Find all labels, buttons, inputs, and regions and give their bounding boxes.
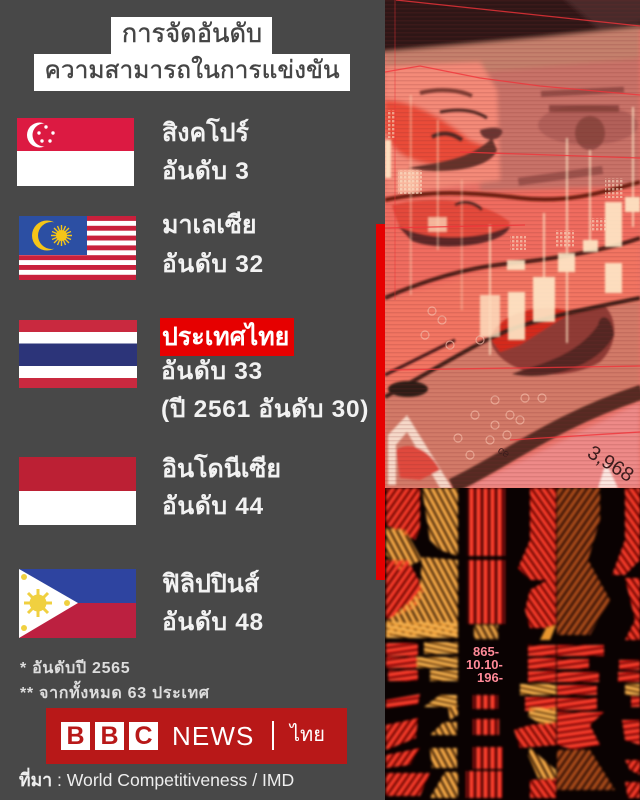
bank note print: [518, 87, 638, 186]
photo: banknotes with candlestick chart overlay: [385, 0, 640, 488]
BBC blocks: C: [134, 722, 153, 750]
country: Indonesia: อันดับ 44: [162, 493, 264, 520]
highlight label: ประเทศไทย: [162, 323, 289, 351]
banknote folds: [385, 182, 640, 486]
BBC blocks: B: [100, 722, 119, 750]
upper grid: [386, 488, 420, 540]
red overlay lines: [385, 0, 640, 440]
footnotes: [20, 659, 210, 702]
flag: Malaysia: [19, 216, 136, 280]
flag: Thailand: [19, 320, 137, 388]
candlesticks: [385, 95, 640, 355]
country: Singapore: สิงคโปร์: [162, 119, 249, 147]
country: Philippines: [162, 570, 264, 636]
lower grid: [386, 694, 420, 708]
ticker numbers: 196-: [477, 670, 503, 685]
country: Singapore: อันดับ 3: [162, 158, 250, 185]
dot-matrix cells: [387, 110, 623, 250]
BBC blocks: [61, 722, 158, 750]
logo: BBC News Thai: [46, 708, 347, 764]
ticker numbers: 10.10-: [466, 657, 503, 672]
country: Indonesia: [162, 454, 281, 520]
country: Thailand highlighted: (ปี 2561 อันดับ 30): [161, 396, 369, 423]
logo: BBC News Thai: NEWS: [172, 721, 254, 751]
country: Indonesia: อินโดนีเซีย: [162, 455, 281, 483]
title: การจัดอันดับ: [122, 20, 262, 48]
country: Malaysia: [162, 211, 264, 278]
country: Malaysia: มาเลเซีย: [162, 211, 257, 239]
ticker numbers: [466, 644, 503, 685]
country: Philippines: อันดับ 48: [162, 609, 264, 636]
BBC blocks: B: [66, 722, 85, 750]
country: Malaysia: อันดับ 32: [162, 251, 264, 278]
country: Singapore: [162, 118, 250, 185]
note figures: 3,968: [583, 442, 637, 487]
banknote faces: [385, 90, 614, 376]
red diamond emblem: [388, 415, 618, 488]
flag: Philippines: [19, 569, 136, 638]
title: [34, 17, 350, 91]
footnotes: * อันดับปี 2565: [20, 660, 130, 677]
country: Philippines: ฟิลิปปินส์: [162, 570, 259, 598]
footnotes: ** จากทั้งหมด 63 ประเทศ: [20, 685, 210, 702]
photo: banknotes with candlestick chart overlay: ce: [495, 444, 512, 461]
ticker numbers: 865-: [473, 644, 499, 659]
source: ที่มา : World Competitiveness / IMD: [19, 770, 294, 790]
country: Thailand highlighted: [160, 318, 369, 423]
logo: BBC News Thai: ไทย: [290, 724, 325, 746]
country: Thailand highlighted: อันดับ 33: [161, 358, 263, 385]
flag: Indonesia: [19, 457, 136, 525]
guilloche circles: [421, 307, 546, 459]
title: ความสามารถในการแข่งขัน: [44, 57, 340, 84]
left accent bar: [376, 224, 385, 580]
data rows: [386, 643, 418, 656]
photo: zoom-blurred red stock ticker board: [385, 488, 640, 800]
flag: Singapore: [17, 118, 134, 186]
